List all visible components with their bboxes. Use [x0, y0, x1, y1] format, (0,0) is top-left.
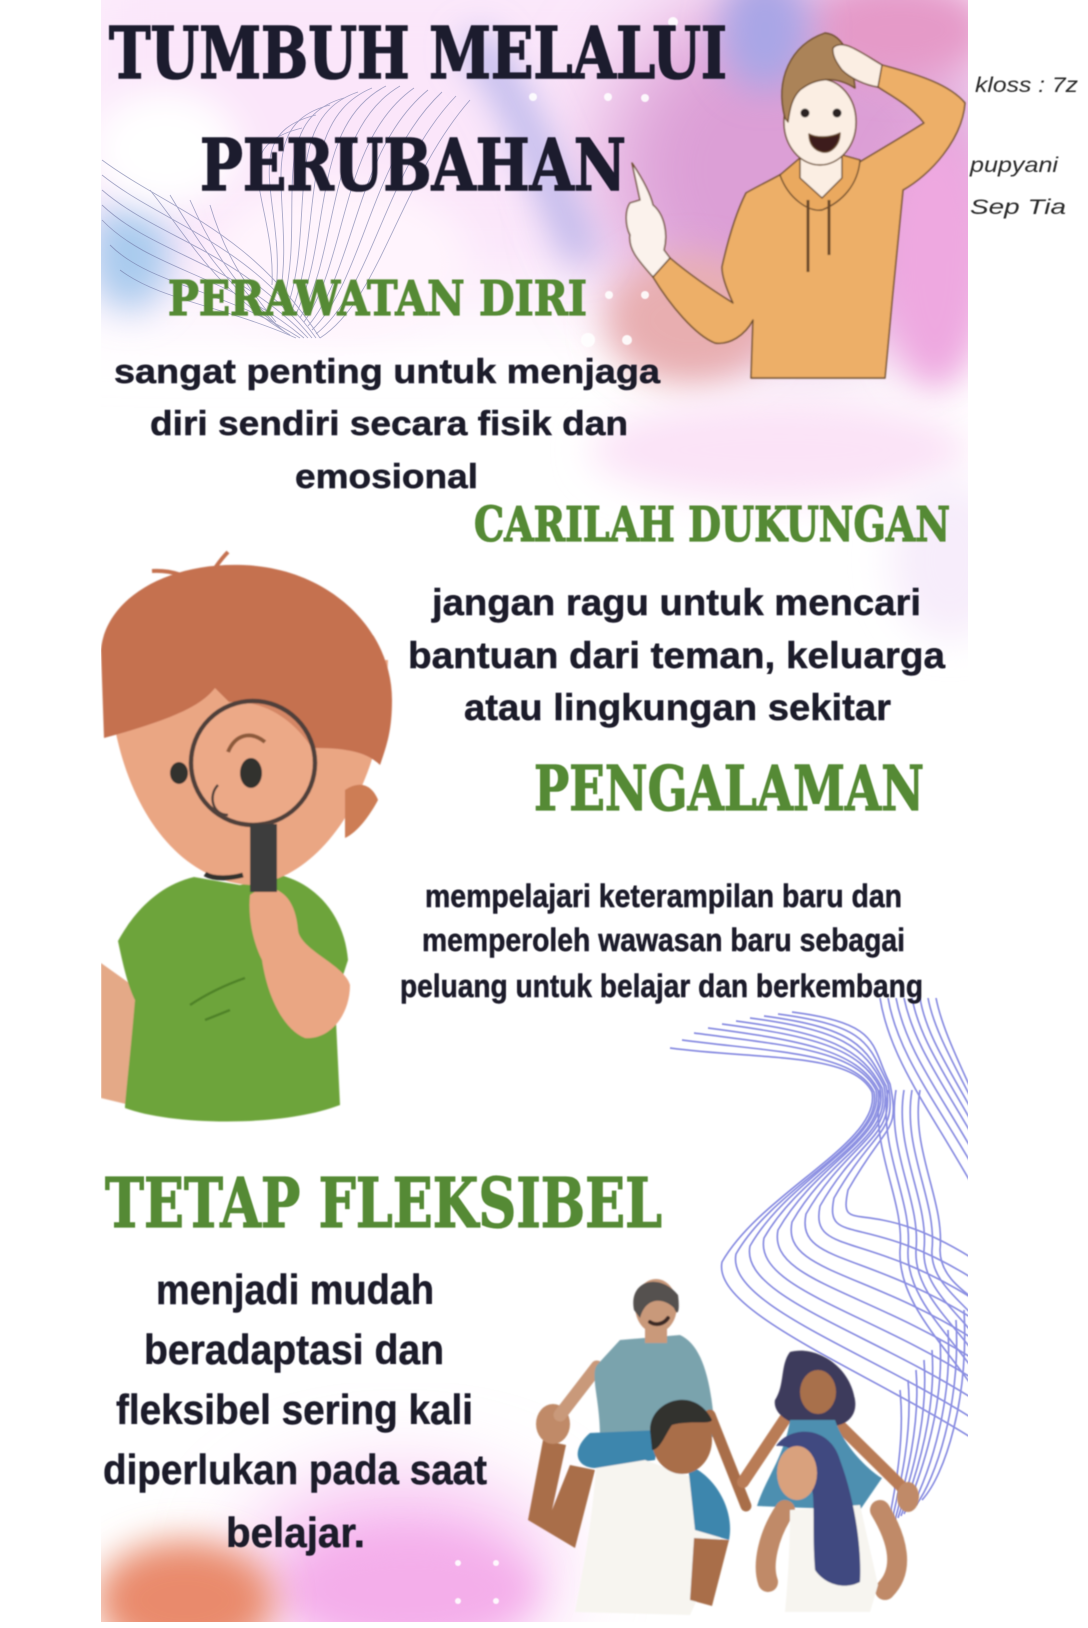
title: TUMBUH MELALUI [109, 11, 727, 95]
text block: tetap fleksibel [103, 1266, 487, 1556]
icon: man in orange hoodie pointing [626, 33, 965, 378]
boy shirt [595, 1335, 715, 1437]
eyes and mouth [800, 108, 810, 118]
eyebrow [228, 735, 265, 752]
hoodie strings [808, 200, 829, 272]
girl hand [897, 1482, 919, 1512]
text block: pengalaman [400, 878, 923, 1004]
hair tuft [151, 550, 230, 576]
text block: carilah dukungan: jangan ragu untuk mencari [431, 582, 921, 623]
nose [213, 785, 228, 815]
handwritten note: pupyani [969, 154, 1060, 177]
text block: perawatan diri: emosional [295, 458, 478, 496]
boy head [635, 1279, 677, 1333]
handwritten note [969, 74, 1079, 219]
text block: perawatan diri: diri sendiri secara fisik dan [150, 405, 628, 443]
handwritten note: Sep Tia [970, 196, 1066, 219]
head skin [108, 660, 388, 885]
father shirt [575, 1460, 722, 1615]
handwritten note: kloss : 7z [975, 74, 1079, 97]
text block: perawatan diri: sangat penting untuk menjaga [114, 353, 661, 391]
panel: poster background [101, 0, 968, 1622]
mouth [205, 874, 243, 878]
hand and forearm [250, 888, 350, 1038]
girl legs and mother arms [766, 1510, 897, 1590]
hoodie body and arms [653, 65, 965, 378]
pointing hand [626, 163, 670, 277]
handle [250, 824, 277, 892]
hair [101, 565, 392, 765]
icon: family with children on shoulders [528, 1279, 919, 1615]
boy neck [645, 1325, 667, 1343]
eyes [170, 762, 188, 784]
boy left arm [560, 1367, 597, 1415]
lens [191, 701, 315, 825]
face [784, 79, 856, 165]
text block: perawatan diri [114, 353, 661, 496]
text block: tetap fleksibel: fleksibel sering kali [116, 1386, 473, 1433]
neck [800, 150, 842, 198]
boy right leg [710, 1415, 746, 1506]
icon: boy with magnifying glass [101, 552, 392, 1122]
decorative line mesh: top left [102, 86, 470, 338]
father hair [650, 1400, 712, 1450]
father lower arm [690, 1538, 729, 1606]
text block: carilah dukungan [408, 582, 945, 728]
text block: pengalaman: peluang untuk belajar dan berkembang [400, 968, 923, 1004]
title: PERUBAHAN [200, 123, 626, 207]
heading: perawatan diri: PERAWATAN DIRI [168, 271, 587, 327]
father head [652, 1406, 712, 1474]
heading: pengalaman: PENGALAMAN [534, 752, 924, 825]
father hand [536, 1404, 570, 1444]
text block: pengalaman: mempelajari keterampilan baru dan [425, 878, 902, 914]
heading: tetap fleksibel: TETAP FLEKSIBEL [105, 1164, 662, 1244]
sparkles [455, 17, 678, 1604]
raised hand [833, 45, 882, 87]
shirt folds [190, 978, 245, 1020]
hair [782, 33, 855, 122]
arm left [101, 963, 139, 1105]
heading: carilah dukungan: CARILAH DUKUNGAN [474, 497, 950, 553]
boy shorts [578, 1430, 660, 1468]
decorative line mesh: bottom right [670, 998, 975, 1520]
text block: carilah dukungan: atau lingkungan sekitar [464, 687, 891, 728]
mother shirt [785, 1505, 878, 1612]
shirt [118, 875, 348, 1122]
girl head [800, 1370, 836, 1414]
text block: pengalaman: memperoleh wawasan baru sebagai [422, 922, 905, 958]
girl hair [775, 1351, 855, 1426]
title [109, 11, 727, 207]
ear [345, 785, 378, 838]
mother face [777, 1446, 817, 1500]
hood [780, 155, 860, 210]
text block: tetap fleksibel: diperlukan pada saat [103, 1446, 487, 1493]
text block: tetap fleksibel: belajar. [226, 1509, 365, 1556]
boy mouth [650, 1318, 668, 1324]
girl arms [743, 1419, 905, 1490]
boy hair [633, 1282, 679, 1318]
girl dress [757, 1420, 882, 1510]
boy leg shorts [688, 1465, 730, 1540]
text block: tetap fleksibel: menjadi mudah [156, 1266, 434, 1313]
text block: tetap fleksibel: beradaptasi dan [144, 1326, 444, 1373]
father raised arm [528, 1440, 595, 1548]
mother hair [776, 1432, 860, 1586]
text block: carilah dukungan: bantuan dari teman, keluarga [408, 635, 945, 676]
